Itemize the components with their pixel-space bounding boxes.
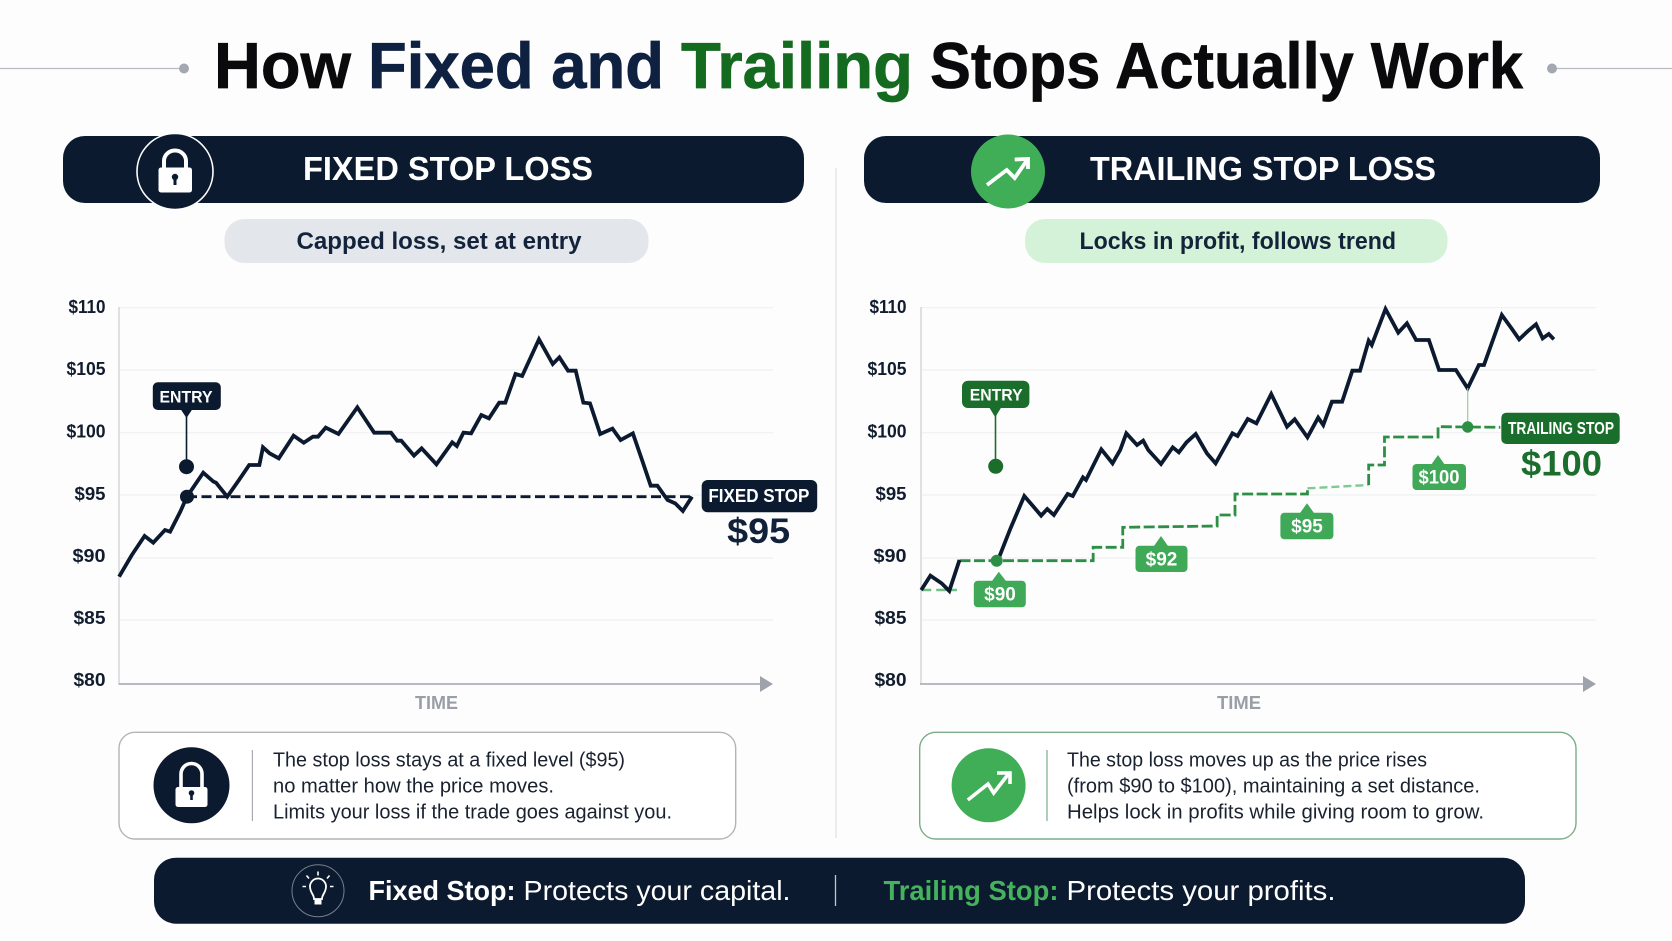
- icon: padlock card: [154, 747, 230, 823]
- chart: fixed stop price: TIME: [415, 692, 458, 713]
- icon: lightbulb: [292, 865, 344, 917]
- chart: fixed stop price: [66, 296, 817, 713]
- step label $90: $90: [984, 585, 1016, 606]
- trailing explanation text: [1067, 749, 1484, 823]
- chart: trailing stop price: [868, 296, 1620, 713]
- trailing explanation text: (from $90 to $100), maintaining a set distance.: [1067, 775, 1480, 798]
- trailing stop step line: [921, 427, 1500, 590]
- entry marker green: ENTRY: [970, 387, 1023, 405]
- bottom takeaway bar: Fixed Stop:: [368, 875, 516, 906]
- chart: fixed stop price: $90: [72, 545, 106, 566]
- chart: trailing stop price: $100: [868, 421, 906, 442]
- bottom takeaway bar: Protects your capital.: [524, 875, 790, 906]
- step label $95: [1280, 503, 1333, 539]
- chart: trailing stop price: $85: [874, 607, 906, 628]
- step label $95: $95: [1291, 517, 1323, 538]
- panel: fixed stop loss: [63, 134, 817, 839]
- trailing explanation card: [920, 732, 1576, 839]
- panel: trailing stop loss: [864, 134, 1620, 839]
- bottom takeaway bar: Protects your profits.: [1066, 875, 1336, 906]
- title: Fixed and: [368, 29, 664, 102]
- step label $100: $100: [1418, 467, 1460, 488]
- chart: fixed stop price: $100: [66, 421, 106, 442]
- chart: trailing stop price: $105: [868, 358, 906, 379]
- chart: trailing stop price: $80: [874, 669, 906, 690]
- fixed explanation text: The stop loss stays at a fixed level ($95): [273, 749, 625, 772]
- trailing subtitle pill: Locks in profit, follows trend: [1080, 228, 1396, 255]
- fixed stop label: $95: [727, 512, 790, 551]
- trailing subtitle pill: [1025, 219, 1448, 263]
- fixed subtitle pill: [224, 219, 648, 263]
- title rule left: [0, 64, 189, 74]
- chart: trailing stop price: TIME: [1217, 692, 1261, 713]
- icon: trend arrow card: [952, 748, 1026, 822]
- chart: fixed stop price: $110: [68, 296, 106, 317]
- trailing explanation text: Helps lock in profits while giving room to grow.: [1067, 800, 1484, 823]
- chart: trailing stop price: $110: [870, 296, 906, 317]
- step label $90: [974, 572, 1026, 607]
- fixed explanation text: Limits your loss if the trade goes against you.: [273, 800, 672, 823]
- chart: trailing stop price: $95: [876, 483, 906, 504]
- chart: fixed stop price: $105: [66, 358, 106, 379]
- entry marker: [153, 382, 221, 474]
- icon: trend arrow header: [971, 134, 1045, 208]
- bottom takeaway bar: [154, 858, 1525, 924]
- title: How: [214, 29, 351, 102]
- trailing header bar: TRAILING STOP LOSS: [1090, 150, 1436, 187]
- step label $92: [1136, 536, 1188, 572]
- entry marker green: [962, 381, 1029, 474]
- title: [214, 29, 1524, 102]
- trailing stop label: TRAILING STOP: [1508, 418, 1614, 438]
- step label $92: $92: [1146, 549, 1177, 570]
- chart: fixed stop price: $95: [74, 483, 106, 504]
- fixed subtitle pill: Capped loss, set at entry: [296, 228, 582, 255]
- icon: padlock header: [137, 134, 213, 210]
- chart: fixed stop price: $80: [74, 669, 106, 690]
- title rule right: [1547, 64, 1672, 74]
- title: Stops Actually Work: [930, 29, 1524, 102]
- trailing stop label: $100: [1521, 445, 1602, 484]
- trailing explanation text: The stop loss moves up as the price rises: [1067, 749, 1427, 772]
- fixed explanation text: no matter how the price moves.: [273, 775, 554, 798]
- step label $100: [1412, 455, 1466, 490]
- fixed header bar: FIXED STOP LOSS: [303, 150, 593, 187]
- title: Trailing: [681, 29, 913, 102]
- trailing stop label: [1501, 413, 1620, 484]
- entry marker: ENTRY: [160, 388, 212, 406]
- fixed explanation card: [119, 732, 736, 839]
- fixed explanation text: [273, 749, 672, 823]
- chart: trailing stop price: $90: [874, 545, 906, 566]
- bottom takeaway bar: Trailing Stop:: [884, 875, 1058, 906]
- trailing header bar: [864, 136, 1600, 203]
- fixed header bar: [63, 136, 804, 203]
- fixed stop label: [702, 480, 817, 551]
- fixed stop label: FIXED STOP: [708, 485, 809, 506]
- chart: fixed stop price: $85: [74, 607, 106, 628]
